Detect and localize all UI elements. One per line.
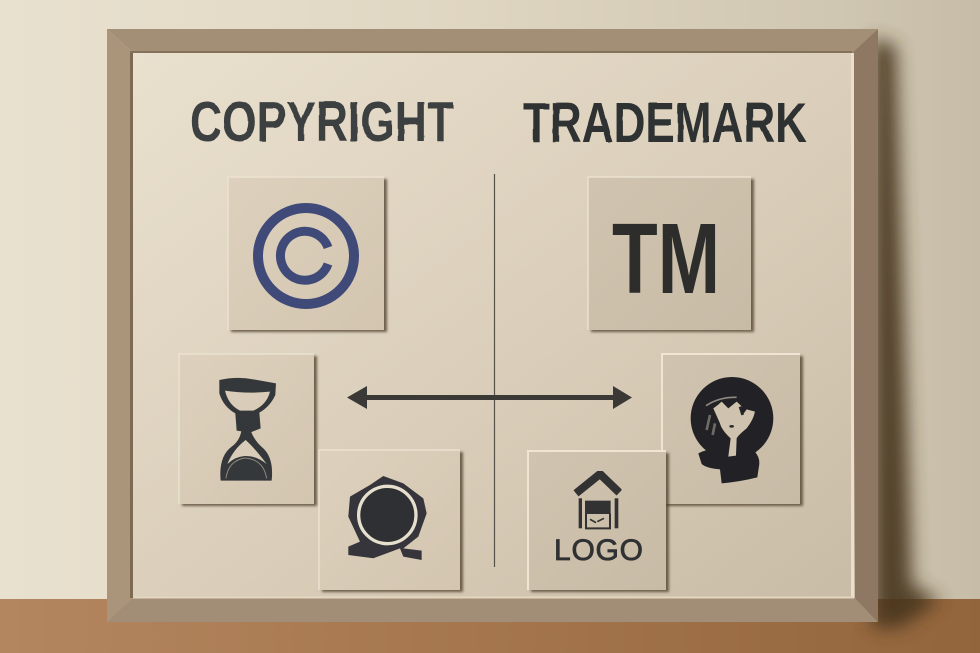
panel: hourglass <box>179 354 314 504</box>
wooden floor <box>0 599 980 653</box>
panel: portrait emblem <box>662 354 800 504</box>
panel: circular seal <box>319 450 460 590</box>
panel: copyright symbol <box>228 177 384 330</box>
frame shadow on wall <box>872 38 940 628</box>
arrow: double-headed <box>347 386 632 409</box>
board inner edge shading <box>130 51 854 598</box>
icon: dark round emblem <box>691 377 773 483</box>
panel: trademark symbol <box>588 177 751 330</box>
icon: TM mark: TM <box>612 203 720 315</box>
panel: logo <box>528 451 666 590</box>
label: logo: LOGO <box>554 534 643 567</box>
vertical divider <box>494 174 496 567</box>
icon: copyright circle <box>258 208 354 304</box>
heading: copyright: COPYRIGHT <box>190 90 454 154</box>
icon: hourglass <box>219 378 276 481</box>
heading: trademark: TRADEMARK <box>523 91 807 155</box>
icon: house logo <box>576 474 619 528</box>
board surface <box>133 53 852 598</box>
icon: seal blob <box>348 476 427 560</box>
wooden frame <box>107 29 878 622</box>
